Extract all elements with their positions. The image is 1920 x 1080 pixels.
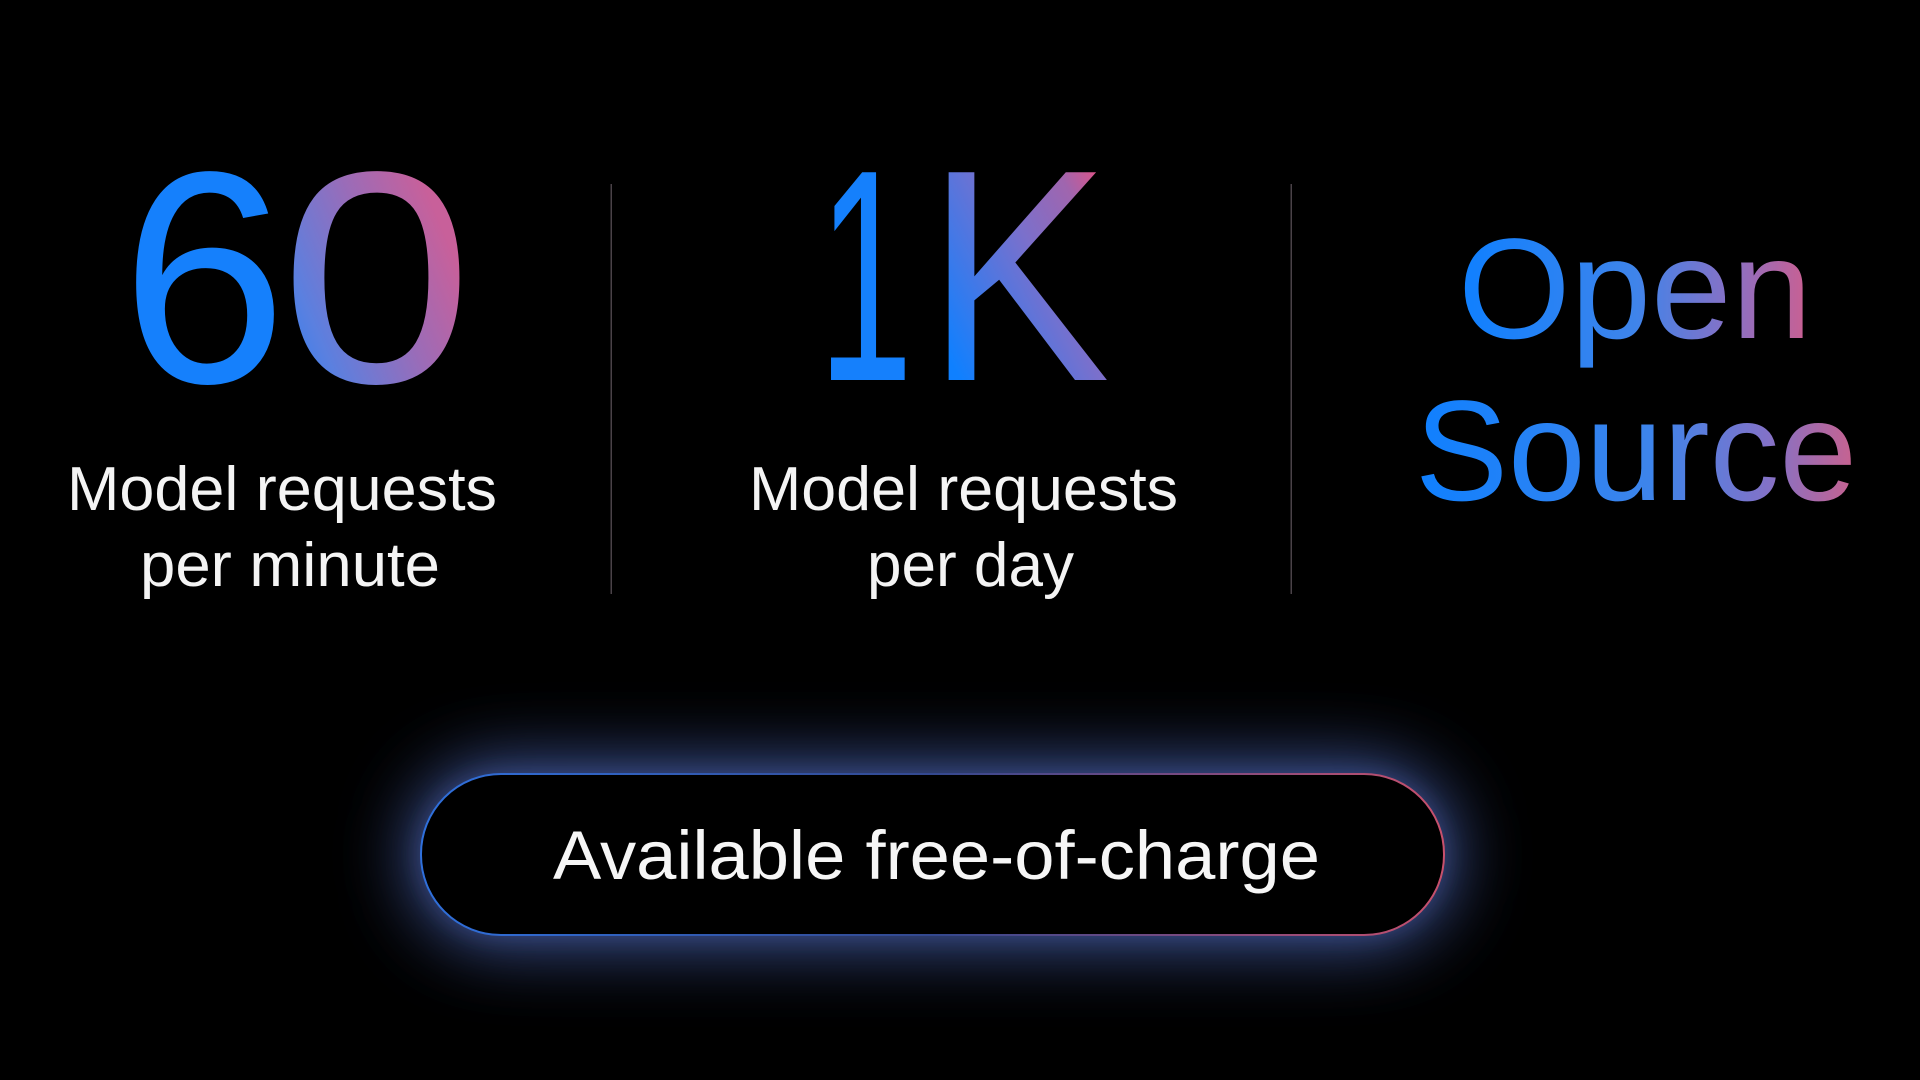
pill body [421, 774, 1444, 935]
big number 1K [818, 107, 1110, 444]
stat: 60 model requests per minute [67, 109, 497, 600]
big number 60: 0 [280, 109, 473, 446]
big number 1K: K [926, 107, 1110, 444]
label: model requests per minute: per minute [140, 531, 440, 600]
word: Source: Source [1415, 372, 1857, 531]
stat: open source [1415, 210, 1857, 531]
label: model requests per minute [67, 455, 497, 600]
word: Open: Open [1458, 210, 1812, 369]
stat: 1K model requests per day [749, 107, 1178, 600]
pill glow [411, 764, 1454, 945]
label: model requests per day: per day [867, 531, 1074, 600]
big number 60 [121, 109, 473, 446]
big number 60: 6 [121, 109, 287, 446]
label: model requests per day [749, 455, 1178, 600]
divider right [1290, 184, 1292, 594]
callout pill: available free-of-charge [411, 764, 1454, 945]
big number 1K: 1 [818, 107, 913, 444]
label: model requests per minute: Model requests [67, 455, 497, 524]
label: model requests per day: Model requests [749, 455, 1178, 524]
divider left [610, 184, 612, 594]
pill label: Available free-of-charge [553, 817, 1320, 894]
